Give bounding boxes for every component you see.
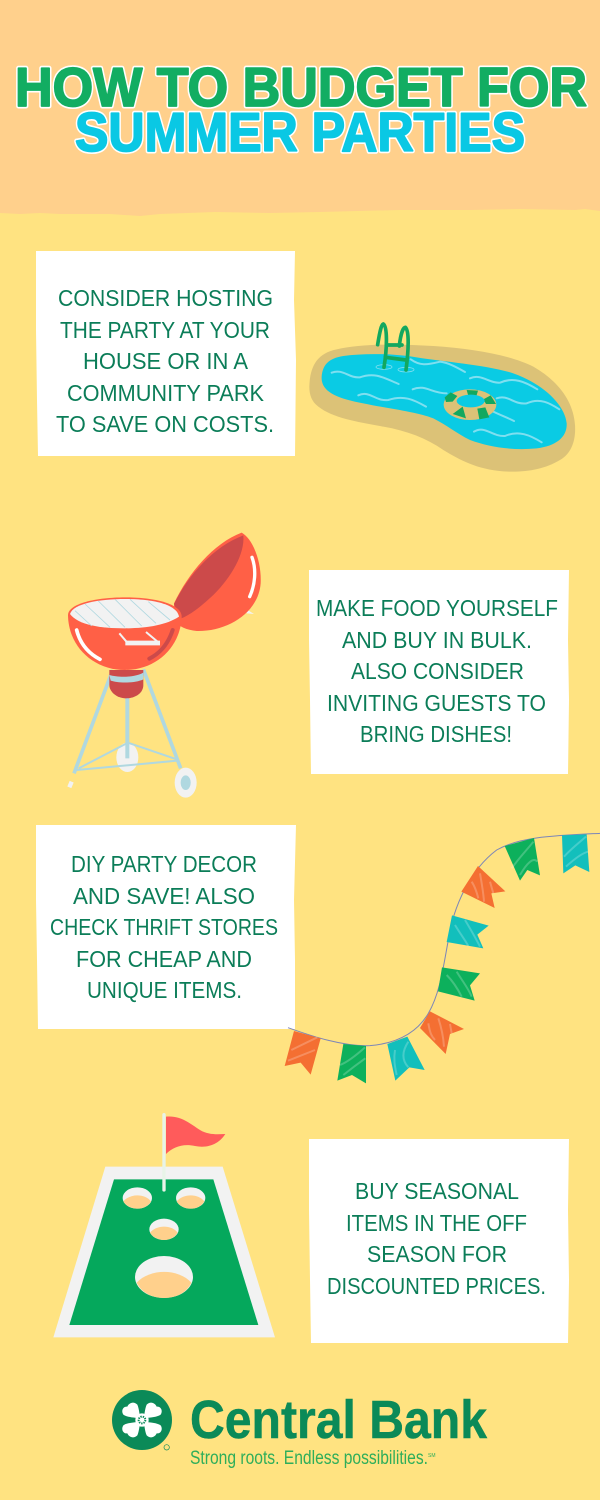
icon: swim ring: [444, 389, 496, 420]
panel: make food: [309, 570, 569, 774]
title: SUMMER PARTIES: [75, 101, 525, 163]
icon: barbecue grill: [68, 533, 261, 798]
panel: make food: AND BUY IN BULK.: [342, 627, 532, 653]
icon: swimming pool: [309, 324, 575, 472]
title: SUMMER PARTIES: [75, 101, 525, 163]
tagline: Strong roots. Endless possibilities.: [190, 1448, 428, 1469]
panel: DIY decor: [36, 825, 296, 1029]
panel: seasonal items: ITEMS IN THE OFF: [346, 1210, 527, 1236]
icon: bunting: [285, 833, 600, 1083]
panel: seasonal items: DISCOUNTED PRICES.: [327, 1273, 546, 1299]
service mark: SM: [428, 1453, 436, 1459]
panel: seasonal items: SEASON FOR: [367, 1241, 507, 1267]
panel: seasonal items: [309, 1139, 569, 1343]
panel: DIY decor: UNIQUE ITEMS.: [87, 977, 242, 1003]
panel: host at home: THE PARTY AT YOUR: [60, 317, 270, 343]
panel: make food: BRING DISHES!: [360, 721, 512, 747]
panel: make food: MAKE FOOD YOURSELF: [316, 595, 558, 621]
panel: DIY decor: FOR CHEAP AND: [76, 946, 252, 972]
panel: host at home: [36, 251, 296, 456]
title: [15, 56, 587, 163]
header band: [0, 0, 600, 216]
icon: dogwood flower: [112, 1390, 172, 1450]
panel: DIY decor: AND SAVE! ALSO: [73, 883, 255, 909]
panel: seasonal items: BUY SEASONAL: [355, 1178, 519, 1204]
panel: make food: ALSO CONSIDER: [351, 658, 524, 684]
panel: make food: INVITING GUESTS TO: [327, 690, 546, 716]
panel: DIY decor: DIY PARTY DECOR: [71, 851, 257, 877]
panel: DIY decor: CHECK THRIFT STORES: [50, 914, 278, 940]
icon: cornhole board: [53, 1115, 275, 1337]
panel: host at home: COMMUNITY PARK: [67, 380, 264, 406]
logo: Central Bank: [112, 1390, 488, 1469]
panel: host at home: TO SAVE ON COSTS.: [56, 411, 274, 437]
panel: host at home: CONSIDER HOSTING: [58, 285, 273, 311]
wordmark: Central Bank: [190, 1390, 488, 1450]
panel: host at home: HOUSE OR IN A: [83, 348, 248, 374]
